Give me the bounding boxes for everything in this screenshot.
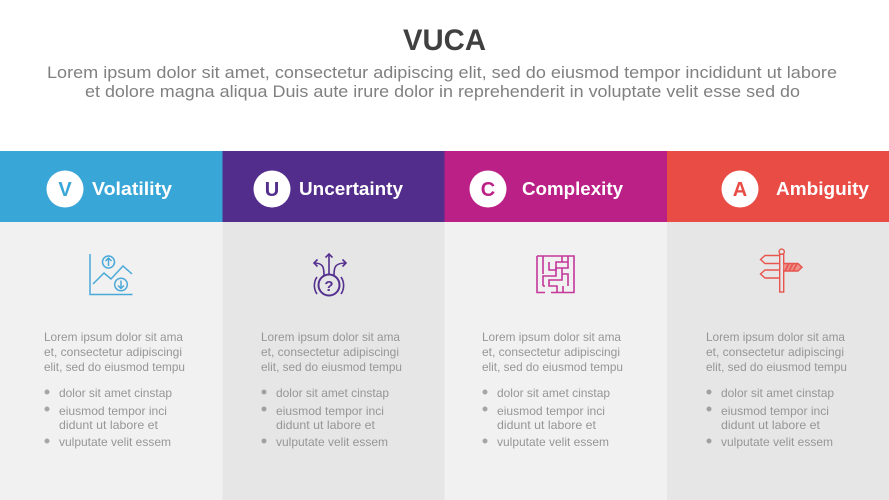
- body text: et, consectetur adipiscingi: [44, 345, 182, 359]
- body text: [482, 330, 623, 374]
- body text: elit, sed do eiusmod tempu: [44, 360, 185, 374]
- header: Uncertainty: U: [265, 179, 279, 201]
- panel: Uncertainty: [222, 151, 444, 500]
- icon: line chart with up and down arrows: [90, 254, 132, 294]
- header: Ambiguity: Ambiguity: [776, 179, 869, 199]
- header: Complexity: C: [481, 179, 495, 201]
- icon: signpost: [760, 249, 802, 292]
- body text: [261, 330, 402, 374]
- bullet list: vulputate velit essem: [276, 435, 388, 449]
- bullet list: eiusmod tempor inci: [497, 404, 605, 418]
- header: Complexity: Complexity: [522, 179, 623, 199]
- bullet list: didunt ut labore et: [721, 418, 821, 432]
- body text: [44, 330, 185, 374]
- panel: Volatility: [0, 151, 222, 500]
- bullet list: [706, 386, 834, 449]
- bullet list: vulputate velit essem: [59, 435, 171, 449]
- bullet list: vulputate velit essem: [497, 435, 609, 449]
- panel: Ambiguity: [667, 151, 889, 500]
- bullet list: eiusmod tempor inci: [276, 404, 384, 418]
- subtitle text block: [47, 63, 837, 101]
- body text: Lorem ipsum dolor sit ama: [482, 330, 621, 344]
- body text: Lorem ipsum dolor sit ama: [261, 330, 400, 344]
- header: Ambiguity: [667, 151, 889, 222]
- icon: arrows and question mark: [314, 254, 346, 296]
- bullet list: didunt ut labore et: [497, 418, 597, 432]
- header: Ambiguity: A: [733, 179, 747, 201]
- header: Complexity: [444, 151, 667, 222]
- panel: Complexity: [444, 151, 667, 500]
- body text: et, consectetur adipiscingi: [706, 345, 844, 359]
- body text: elit, sed do eiusmod tempu: [706, 360, 847, 374]
- bullet list: dolor sit amet cinstap: [276, 386, 389, 400]
- body text: Lorem ipsum dolor sit ama: [44, 330, 183, 344]
- bullet list: [44, 386, 172, 449]
- subtitle text block: et dolore magna aliqua Duis aute irure dolor in reprehenderit in voluptate velit esse sed do: [85, 82, 800, 101]
- bullet list: eiusmod tempor inci: [59, 404, 167, 418]
- header: Volatility: Volatility: [92, 179, 172, 199]
- icon: maze: [537, 256, 574, 292]
- bullet list: dolor sit amet cinstap: [497, 386, 610, 400]
- bullet list: didunt ut labore et: [276, 418, 376, 432]
- header: Uncertainty: Uncertainty: [299, 179, 403, 199]
- header: Uncertainty: [222, 151, 444, 222]
- body text: Lorem ipsum dolor sit ama: [706, 330, 845, 344]
- header: Volatility: V: [58, 179, 72, 201]
- body text: elit, sed do eiusmod tempu: [261, 360, 402, 374]
- bullet list: eiusmod tempor inci: [721, 404, 829, 418]
- header: Volatility: [0, 151, 222, 222]
- bullet list: [262, 386, 389, 449]
- body text: elit, sed do eiusmod tempu: [482, 360, 623, 374]
- body text: et, consectetur adipiscingi: [261, 345, 399, 359]
- title: VUCA: [403, 24, 486, 57]
- bullet list: dolor sit amet cinstap: [59, 386, 172, 400]
- bullet list: vulputate velit essem: [721, 435, 833, 449]
- body text: [706, 330, 847, 374]
- icon: arrows and question mark: ?: [324, 278, 334, 295]
- bullet list: didunt ut labore et: [59, 418, 159, 432]
- body text: et, consectetur adipiscingi: [482, 345, 620, 359]
- bullet list: dolor sit amet cinstap: [721, 386, 834, 400]
- subtitle text block: Lorem ipsum dolor sit amet, consectetur adipiscing elit, sed do eiusmod tempor incididunt ut labore: [47, 63, 837, 82]
- bullet list: [482, 386, 610, 449]
